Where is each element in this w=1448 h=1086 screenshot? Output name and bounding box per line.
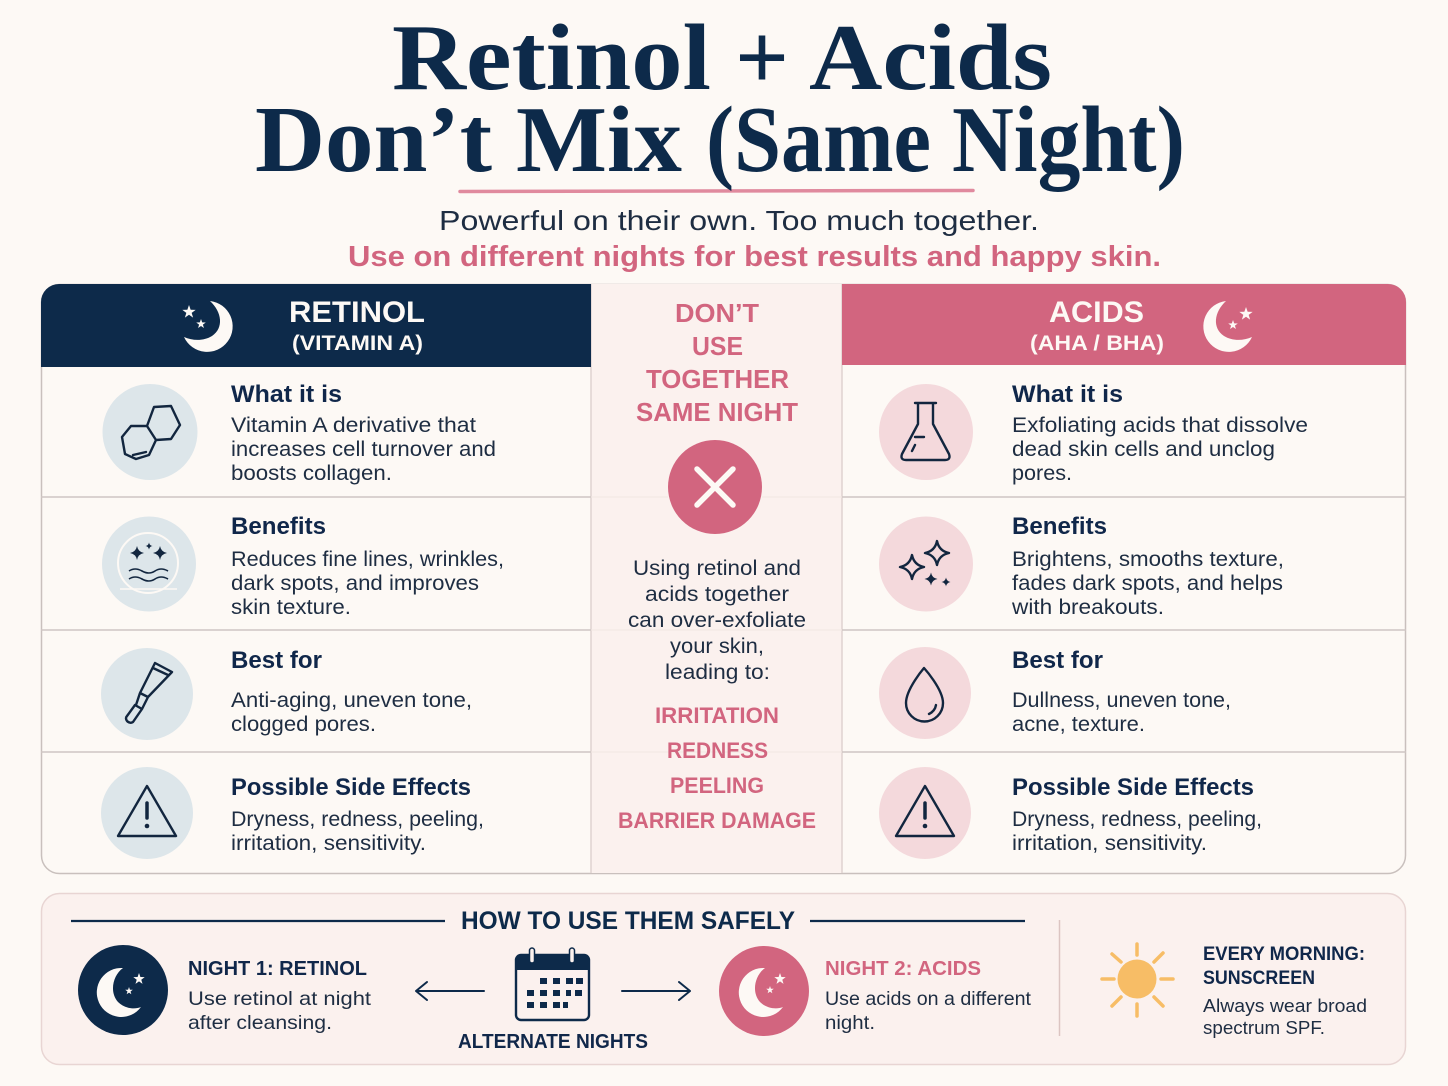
panel: table background: [42, 284, 1406, 874]
subtitle: Powerful on their own. Too much together.: [439, 205, 1039, 236]
text: side effects: [1012, 774, 1262, 855]
text: alternate nights: ALTERNATE NIGHTS: [458, 1031, 648, 1053]
text: benefits: Brightens, smooths texture,: [1012, 548, 1284, 571]
text: best for: Anti-aging, uneven tone,: [231, 689, 472, 712]
text: benefits: Benefits: [231, 513, 326, 540]
icon: night 1 moon: [78, 945, 168, 1035]
risks list: BARRIER DAMAGE: [618, 808, 816, 833]
center explanation: acids together: [645, 583, 789, 606]
subtitle: [348, 205, 1161, 273]
title: (Same: [706, 88, 931, 192]
text: night 1: [188, 958, 372, 1034]
title: Don’t: [255, 88, 492, 192]
text: night 2: NIGHT 2: ACIDS: [825, 958, 981, 980]
risks list: IRRITATION: [655, 703, 779, 728]
icon: acids moon: [1203, 301, 1253, 352]
panel: center warning column: [591, 284, 842, 873]
text: benefits: with breakouts.: [1011, 596, 1164, 619]
center heading: SAME NIGHT: [636, 397, 798, 427]
text: benefits: [231, 513, 504, 619]
panel: retinol what it is: [102, 381, 496, 485]
icon: x mark: [668, 440, 762, 534]
text: what it is: dead skin cells and unclog: [1012, 438, 1275, 461]
retinol heading: RETINOL: [289, 296, 425, 329]
text: what it is: [1012, 381, 1308, 485]
text: benefits: Reduces fine lines, wrinkles,: [231, 548, 504, 571]
text: best for: Best for: [1012, 647, 1103, 674]
text: every morning: Always wear broad: [1203, 995, 1367, 1016]
icon: warning: [101, 767, 193, 859]
text: best for: Dullness, uneven tone,: [1012, 689, 1231, 712]
text: benefits: Benefits: [1012, 513, 1107, 540]
title: Acids: [809, 6, 1052, 110]
center heading: DON’T: [675, 298, 759, 328]
text: every morning: spectrum SPF.: [1203, 1017, 1325, 1038]
retinol heading: [289, 296, 425, 355]
icon: night 2 moon: [719, 946, 809, 1036]
text: night 1: after cleansing.: [188, 1012, 332, 1034]
center explanation: your skin,: [670, 635, 764, 658]
center heading: USE: [692, 331, 743, 361]
text: benefits: dark spots, and improves: [231, 572, 479, 595]
text: best for: [1012, 647, 1231, 736]
center heading: [636, 298, 798, 427]
risks list: [618, 703, 816, 833]
acids heading: ACIDS: [1049, 296, 1144, 329]
text: what it is: boosts collagen.: [231, 462, 392, 485]
text: what it is: Exfoliating acids that dissolve: [1012, 414, 1308, 437]
panel: retinol benefits: [102, 513, 504, 619]
title: [255, 6, 1185, 192]
subtitle: Use on different nights for best results and happy skin.: [348, 241, 1161, 273]
text: night 1: NIGHT 1: RETINOL: [188, 958, 367, 980]
icon: serum tube: [101, 648, 193, 740]
text: what it is: [231, 381, 496, 485]
center explanation: [628, 557, 806, 684]
center explanation: leading to:: [665, 661, 770, 684]
row dividers: [41, 497, 1406, 752]
text: every morning: EVERY MORNING:: [1203, 944, 1365, 965]
text: night 2: Use acids on a different: [825, 988, 1032, 1010]
icon: calendar: [516, 948, 589, 1020]
arrow: right: [622, 982, 690, 1000]
icon: warning: [879, 767, 971, 859]
text: every morning: SUNSCREEN: [1203, 968, 1315, 989]
text: best for: Best for: [231, 647, 322, 674]
text: benefits: [1011, 513, 1284, 619]
panel: acids side effects: [879, 767, 1262, 859]
text: side effects: irritation, sensitivity.: [231, 832, 426, 855]
text: what it is: What it is: [231, 381, 342, 408]
center explanation: can over-exfoliate: [628, 609, 806, 632]
text: what it is: What it is: [1012, 381, 1123, 408]
icon: sparkles: [879, 516, 973, 612]
section heading: HOW TO USE THEM SAFELY: [461, 907, 795, 935]
text: night 2: [825, 958, 1032, 1034]
text: side effects: Possible Side Effects: [231, 774, 471, 801]
panel: retinol best for: [101, 647, 472, 740]
text: best for: [231, 647, 472, 736]
text: what it is: pores.: [1012, 462, 1072, 485]
icon: droplet: [879, 647, 971, 739]
title: Mix: [516, 88, 682, 192]
center heading: TOGETHER: [646, 364, 789, 394]
icon: flask: [879, 384, 973, 480]
panel: acids best for: [879, 647, 1231, 739]
text: benefits: skin texture.: [231, 596, 351, 619]
text: night 1: Use retinol at night: [188, 988, 372, 1010]
title: Night): [952, 88, 1185, 192]
center explanation: Using retinol and: [633, 557, 801, 580]
comparison table: [41, 284, 1406, 874]
text: side effects: Dryness, redness, peeling,: [1012, 808, 1262, 831]
icon: retinol moon: [182, 301, 233, 352]
panel: how to use them safely: [42, 894, 1406, 1064]
risks list: PEELING: [670, 773, 764, 798]
divider: [1058, 920, 1060, 1036]
text: best for: clogged pores.: [231, 713, 376, 736]
risks list: REDNESS: [667, 738, 768, 763]
icon: sun: [1102, 944, 1173, 1016]
text: what it is: increases cell turnover and: [231, 438, 496, 461]
text: what it is: Vitamin A derivative that: [231, 414, 476, 437]
text: side effects: Possible Side Effects: [1012, 774, 1254, 801]
panel: acids what it is: [879, 381, 1308, 485]
text: night 2: night.: [825, 1012, 875, 1034]
text: every morning: [1203, 944, 1367, 1038]
text: benefits: fades dark spots, and helps: [1012, 572, 1283, 595]
arrow: left: [416, 982, 484, 1000]
text: best for: acne, texture.: [1012, 713, 1145, 736]
title: Retinol: [392, 6, 711, 110]
text: side effects: irritation, sensitivity.: [1012, 832, 1207, 855]
title underline: [460, 190, 973, 192]
text: side effects: Dryness, redness, peeling,: [231, 808, 484, 831]
icon: molecule: [102, 384, 198, 480]
text: side effects: [231, 774, 484, 855]
panel: retinol header: [41, 284, 591, 367]
panel: acids header: [842, 284, 1406, 365]
panel: retinol side effects: [101, 767, 484, 859]
acids heading: (AHA / BHA): [1030, 332, 1164, 355]
acids heading: [1030, 296, 1164, 355]
panel: acids benefits: [879, 513, 1284, 619]
retinol heading: (VITAMIN A): [292, 332, 423, 355]
title: +: [735, 6, 789, 110]
icon: smooth skin: [102, 516, 196, 612]
